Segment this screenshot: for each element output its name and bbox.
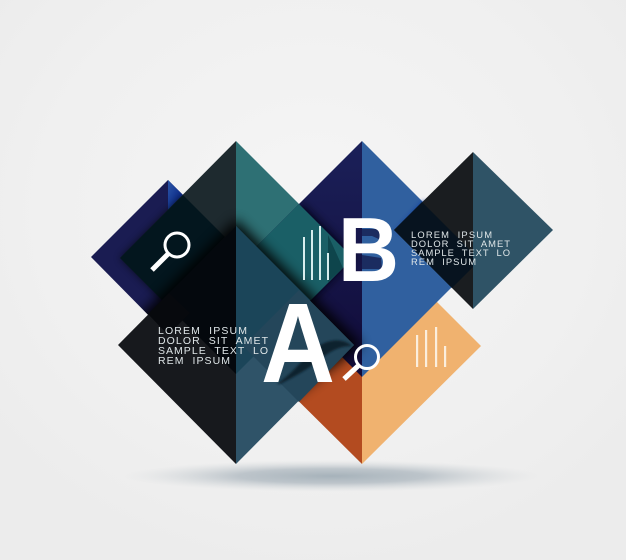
- ground shadow: [124, 460, 540, 492]
- text block left: LOREM IPSUM: [158, 325, 247, 337]
- icon: magnifier left: [152, 233, 189, 270]
- text block right: [411, 229, 510, 267]
- panel: big diamond: [118, 226, 354, 464]
- panel: blue diamond: [256, 141, 452, 377]
- panel: teal diamond: [118, 141, 299, 300]
- icon: bars on teal: [303, 226, 329, 280]
- text block right: LOREM IPSUM: [411, 229, 492, 240]
- text block left: REM IPSUM: [158, 355, 230, 367]
- panel: dark right diamond: [394, 152, 553, 309]
- letter B: B: [338, 200, 399, 301]
- panel: small navy diamond: [91, 180, 245, 335]
- icon: magnifier bottom: [344, 346, 378, 379]
- text block left: SAMPLE TEXT LO: [158, 345, 268, 357]
- text block right: SAMPLE TEXT LO: [411, 247, 510, 258]
- text block right: REM IPSUM: [411, 256, 476, 267]
- icon: bars on orange: [416, 327, 446, 367]
- text block left: [158, 325, 269, 367]
- text block right: DOLOR SIT AMET: [411, 238, 510, 249]
- shadow of big diamond: [139, 214, 368, 402]
- panel: orange diamond: [243, 227, 481, 464]
- text block left: DOLOR SIT AMET: [158, 335, 269, 347]
- letter A: A: [261, 280, 335, 406]
